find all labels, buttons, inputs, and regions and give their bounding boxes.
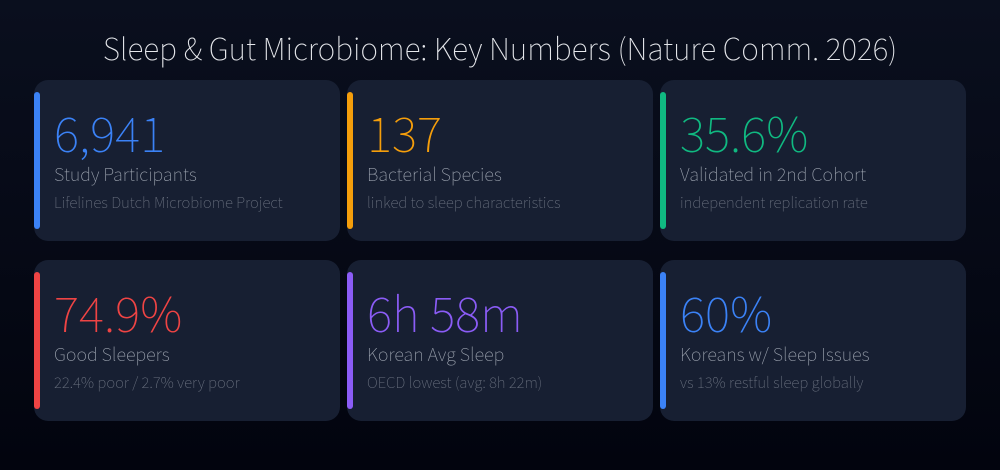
panel: koreans with sleep issues (660, 260, 966, 421)
panel: koreans with sleep issues: vs 13% restful sleep globally (680, 372, 863, 393)
panel: good sleepers: 22.4% poor / 2.7% very poor (54, 372, 240, 393)
panel: korean avg sleep: 6h 58m (367, 276, 523, 346)
panel: good sleepers (34, 260, 340, 421)
panel: study participants: Lifelines Dutch Microbiome Project (54, 192, 283, 213)
panel: koreans with sleep issues: Koreans w/ Sleep Issues (680, 341, 870, 367)
panel: korean avg sleep: Korean Avg Sleep (367, 341, 504, 367)
panel: korean avg sleep (347, 260, 653, 421)
panel: validated in 2nd cohort: 35.6% (680, 96, 808, 166)
panel: study participants: 6,941 (54, 96, 165, 166)
panel: validated in 2nd cohort: Validated in 2nd Cohort (680, 161, 866, 187)
panel: korean avg sleep: OECD lowest (avg: 8h 22m) (367, 372, 542, 393)
panel: bacterial species: 137 (367, 96, 442, 166)
panel: good sleepers: Good Sleepers (54, 341, 170, 367)
panel: study participants (34, 80, 340, 241)
panel: validated in 2nd cohort (660, 80, 966, 241)
panel: good sleepers: 74.9% (54, 276, 182, 346)
panel: bacterial species: linked to sleep characteristics (367, 192, 561, 213)
title: Sleep & Gut Microbiome: Key Numbers (Nature Comm. 2026) (103, 25, 897, 69)
panel: bacterial species: Bacterial Species (367, 161, 502, 187)
panel: koreans with sleep issues: 60% (680, 276, 772, 346)
panel: study participants: Study Participants (54, 161, 197, 187)
panel: validated in 2nd cohort: independent replication rate (680, 192, 868, 213)
panel: bacterial species (347, 80, 653, 241)
